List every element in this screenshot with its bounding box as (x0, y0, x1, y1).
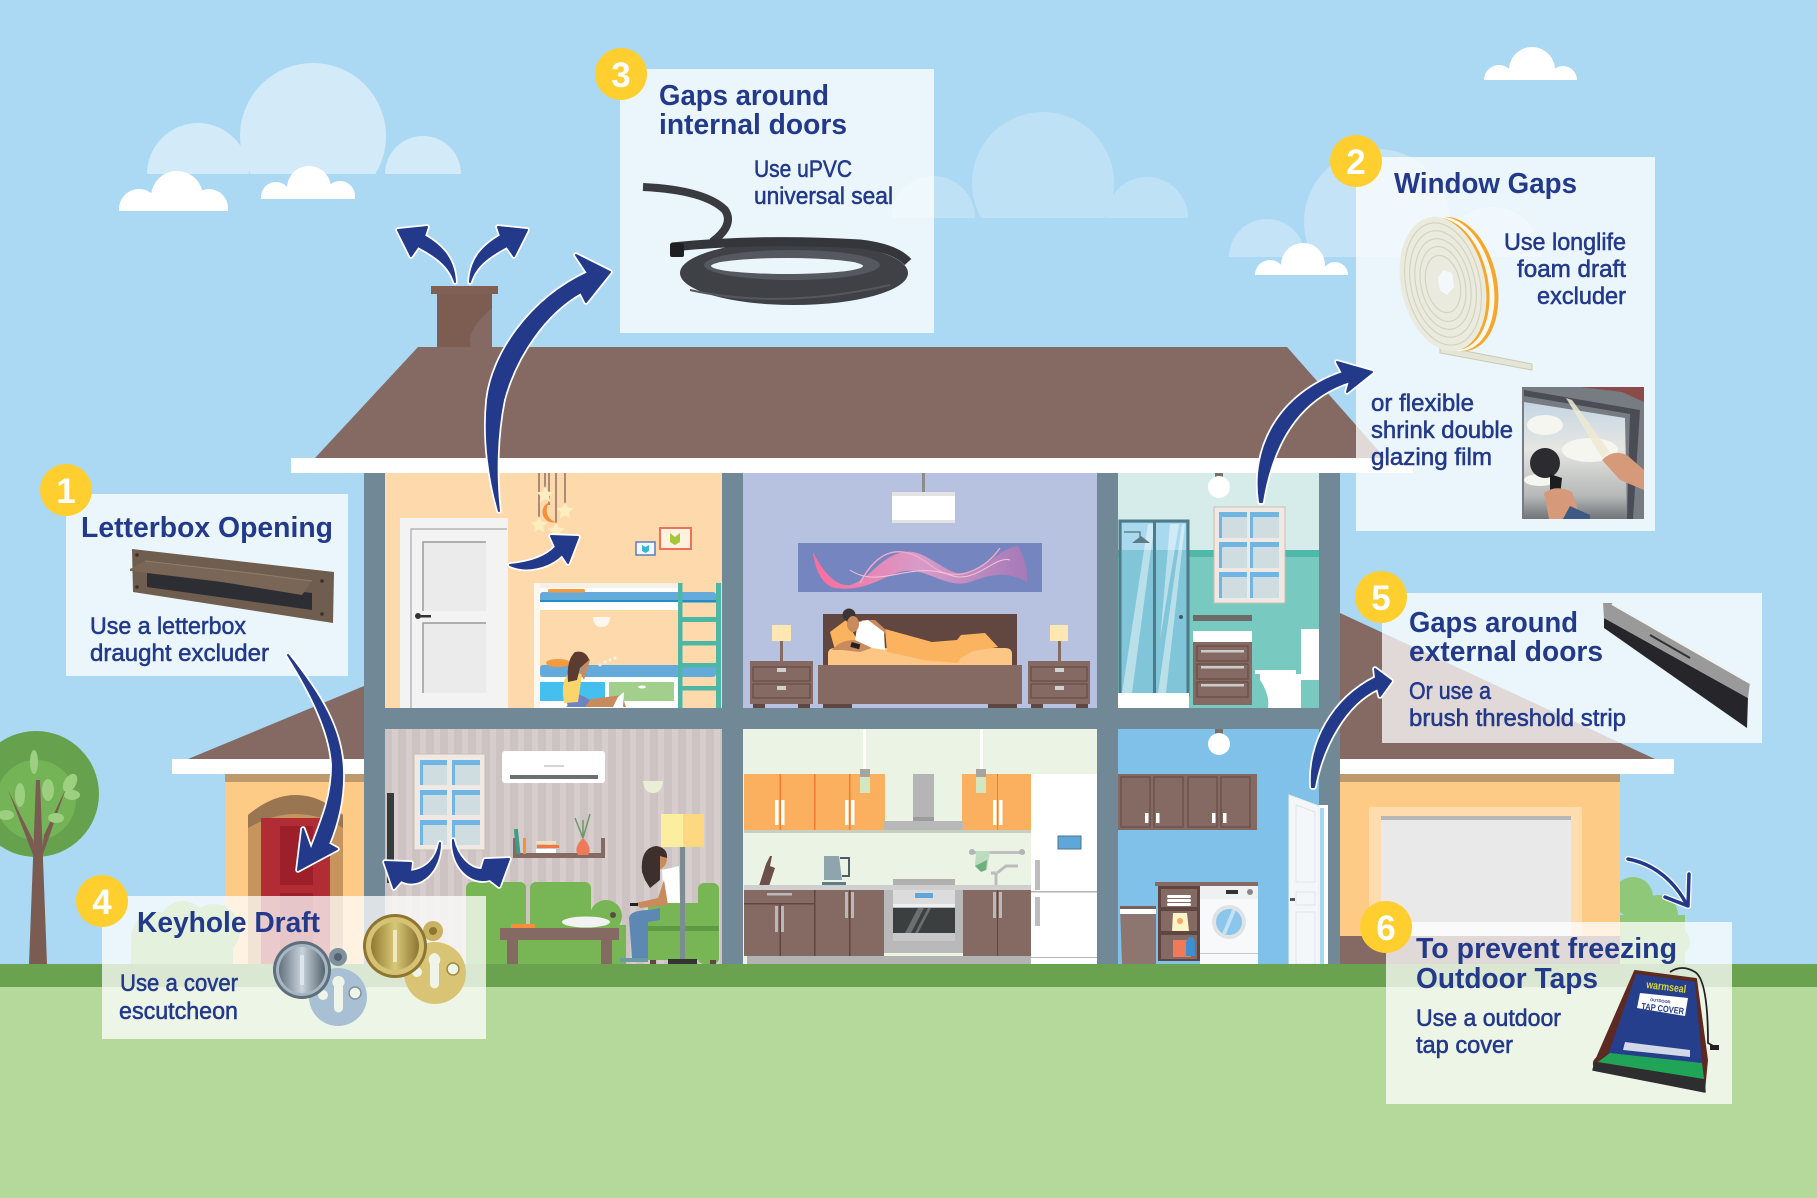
heading: external doors (1409, 636, 1603, 668)
bedroom door (400, 518, 508, 708)
arrow: from internal door up to panel 3 (487, 255, 610, 511)
arrow: chimney left (398, 227, 455, 282)
heading: To prevent freezing (1416, 933, 1677, 965)
lower cabinets (744, 890, 1031, 964)
open external door (1289, 795, 1328, 964)
badge 5 (1355, 571, 1407, 623)
instruction text: Use a cover (120, 970, 238, 997)
brush threshold strip product (1603, 603, 1750, 728)
instruction text (1409, 678, 1626, 732)
badge 6 (1360, 901, 1412, 953)
wall painting (798, 543, 1042, 592)
kettle (822, 856, 849, 886)
heading: Outdoor Taps (1416, 963, 1598, 995)
bed (818, 614, 1022, 708)
silver escutcheon product (273, 941, 367, 1026)
instruction text: Use a letterbox (90, 613, 246, 640)
glazing film photo (1522, 387, 1644, 519)
room: children's bedroom (385, 473, 722, 708)
living room window (414, 754, 485, 850)
badge 1 (40, 464, 92, 516)
heading: Keyhole Draft (137, 907, 320, 939)
badge 1: 1 (56, 472, 76, 511)
badge 2 (1330, 135, 1382, 187)
left annex with red door (131, 686, 364, 964)
upper cabinets (744, 774, 1031, 833)
bedside table left (750, 625, 813, 708)
pale cloud right (1229, 149, 1410, 257)
house walls and floor slab (364, 473, 1340, 964)
instruction text (754, 156, 893, 210)
star mobile (530, 473, 574, 538)
instruction text: draught excluder (90, 640, 269, 667)
fridge (1031, 774, 1097, 964)
roof eave (291, 458, 1413, 473)
wall light (643, 781, 663, 793)
heading (1409, 607, 1603, 668)
cooker hood (884, 774, 963, 830)
foam excluder roll product (1388, 209, 1532, 370)
arrow: window to panel 2 (1259, 362, 1372, 502)
instruction text (119, 970, 238, 1025)
instruction text: foam: excluder (1537, 283, 1626, 310)
instruction text (1416, 1005, 1561, 1059)
arrow: under bedroom door (510, 536, 578, 568)
arrow: letterbox to front door (288, 655, 342, 870)
badge 4: 4 (92, 883, 112, 922)
panel 1: letterbox opening (66, 494, 348, 676)
laundry bin (1120, 906, 1156, 964)
upvc seal product (643, 187, 908, 305)
instruction text: Use a outdoor (1416, 1005, 1561, 1032)
heading (1416, 933, 1677, 995)
heading (659, 80, 847, 141)
washing machine (1200, 886, 1258, 964)
pale cloud centre (934, 112, 1188, 218)
instruction text: escutcheon (119, 998, 238, 1025)
pale cloud left (147, 63, 461, 174)
main roof (315, 347, 1385, 458)
room: bathroom (1118, 473, 1319, 708)
bedside table right (1028, 625, 1090, 708)
arrow: door to panel 5 (1312, 669, 1391, 787)
instruction text: universal seal (754, 183, 893, 210)
room: utility (1118, 729, 1328, 964)
laundry shelf (1155, 882, 1258, 961)
instruction text (90, 613, 269, 667)
armchair (648, 883, 719, 964)
outdoor tap cover product: warmseal (1645, 979, 1687, 996)
heading: internal doors (659, 109, 847, 141)
woman on armchair (620, 846, 680, 962)
heading: Gaps around (659, 80, 829, 112)
instruction text: film (1371, 390, 1513, 471)
outdoor tap cover product (1593, 968, 1719, 1092)
heading: Letterbox Opening (81, 512, 333, 544)
wall shelf with books and vase (513, 814, 605, 858)
ground grass band (0, 964, 1817, 987)
badge 6: 6 (1376, 909, 1396, 948)
sofa (466, 882, 626, 964)
pendant lights (860, 729, 986, 793)
bunk bed (534, 583, 721, 708)
knife block (759, 856, 775, 886)
wall tv edge (387, 793, 394, 883)
air conditioner (502, 751, 605, 783)
heading: Gaps around (1409, 607, 1578, 639)
outdoor tap cover product: TAP COVER (1641, 1001, 1685, 1016)
panel 2: window gaps (1356, 157, 1655, 531)
panel 6: outdoor taps (1386, 922, 1732, 1104)
ceiling bulb (1208, 473, 1230, 498)
white cloud B (261, 166, 355, 199)
vanity unit (1193, 615, 1252, 705)
chimney (431, 286, 498, 356)
wall cabinets (1118, 774, 1257, 830)
instruction text: film: glazing film (1371, 444, 1492, 471)
badge 4 (76, 875, 128, 927)
floor lamp (661, 814, 704, 964)
white cloud D (1484, 47, 1577, 80)
instruction text: film: shrink double (1371, 417, 1513, 444)
arrow: chimney right (470, 227, 527, 282)
panel 3: gaps around internal doors (620, 69, 934, 333)
outdoor tap cover product: OUTDOOR (1650, 997, 1671, 1004)
bathroom window (1214, 507, 1285, 603)
instruction text: foam: foam draft (1517, 256, 1626, 283)
butterfly pictures (636, 528, 691, 555)
badge 2: 2 (1346, 143, 1366, 182)
instruction text: foam: Use longlife (1504, 229, 1626, 256)
instruction text: Use uPVC (754, 156, 852, 183)
person lying on bed (830, 608, 998, 663)
shower cabin (1118, 521, 1189, 708)
brass escutcheon product (363, 914, 466, 1004)
letterbox brush product (130, 549, 334, 623)
room: living room (385, 729, 722, 964)
instruction text: Or use a (1409, 678, 1492, 705)
ceiling lamp (892, 473, 955, 523)
toilet (1255, 629, 1319, 708)
room: main bedroom (743, 473, 1097, 708)
towel rail (969, 849, 1025, 872)
arrow: window to left in living room (385, 843, 440, 888)
tap (991, 866, 1018, 886)
cooker (884, 879, 963, 953)
ceiling bulb (1208, 729, 1230, 755)
instruction text: tap cover (1416, 1032, 1513, 1059)
instruction text: film: or flexible (1371, 390, 1474, 417)
panel 5: gaps around external doors (1382, 593, 1762, 743)
badge 5: 5 (1371, 579, 1391, 618)
room: kitchen (743, 729, 1097, 964)
tree (0, 731, 99, 964)
ground lawn (0, 987, 1817, 1198)
right annex with garage (1340, 613, 1690, 964)
instruction text: brush threshold strip (1409, 705, 1626, 732)
badge 3 (595, 48, 647, 100)
coffee table (500, 916, 619, 964)
arrow: window to right in living room (453, 840, 509, 886)
arrow: outdoor tap (1628, 859, 1689, 906)
white cloud C (1255, 243, 1348, 275)
panel 4: keyhole draft (102, 896, 486, 1039)
girl on floor (546, 652, 626, 707)
instruction text: foam (1504, 229, 1626, 310)
heading: Window Gaps (1394, 168, 1577, 200)
white cloud A (119, 171, 228, 211)
worktop (744, 885, 1031, 890)
badge 3: 3 (611, 56, 631, 95)
